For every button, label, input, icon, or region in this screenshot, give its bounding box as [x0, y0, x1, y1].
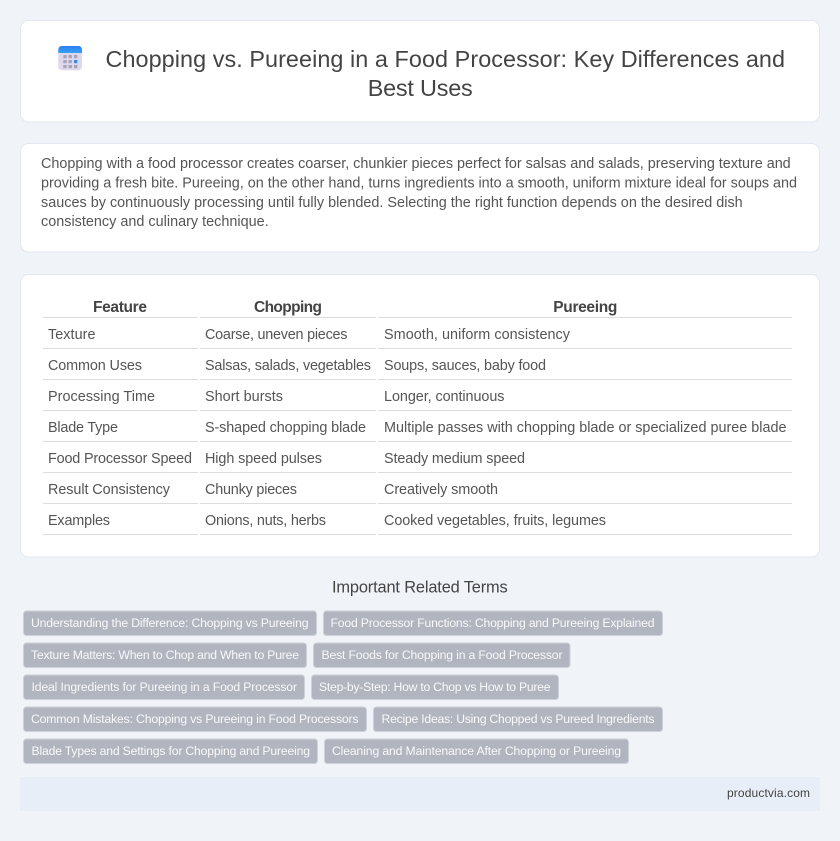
- tag: Ideal Ingredients for Pureeing in a Food Processor: [32, 680, 297, 694]
- panel: title header: [20, 20, 820, 122]
- tag: [324, 611, 662, 636]
- table row: Examples: Onions, nuts, herbs: [205, 513, 326, 529]
- table row: Texture: Texture: [48, 327, 96, 343]
- table row: Result Consistency: [43, 482, 792, 504]
- table row: Examples: Cooked vegetables, fruits, legumes: [384, 513, 606, 529]
- tag: Common Mistakes: Chopping vs Pureeing in Food Processors: [31, 712, 358, 726]
- table header row: Chopping: [254, 299, 322, 316]
- table row: Texture: [43, 327, 792, 349]
- tag: Food Processor Functions: Chopping and Pureeing Explained: [330, 616, 654, 630]
- table header row: [43, 299, 792, 318]
- footer bar: [20, 777, 820, 811]
- tag: Cleaning and Maintenance After Chopping or Pureeing: [332, 744, 621, 758]
- table row: Examples: Examples: [48, 513, 110, 529]
- tag: [24, 611, 316, 636]
- title: Best Uses: [368, 75, 473, 101]
- table row: Blade Type: S-shaped chopping blade: [205, 420, 366, 436]
- text block: intro: Chopping with a food processor creates coarser, chunkier pieces perfect for salsas and salads, preserving texture and: [41, 156, 791, 172]
- table row: Food Processor Speed: [43, 451, 792, 473]
- tag: Recipe Ideas: Using Chopped vs Pureed Ingredients: [382, 712, 654, 726]
- table row: Blade Type: Blade Type: [48, 420, 118, 436]
- table row: Blade Type: [43, 420, 792, 442]
- table row: Food Processor Speed: High speed pulses: [205, 451, 322, 467]
- table row: Common Uses: [43, 358, 792, 380]
- icon: calendar grid: [58, 46, 82, 70]
- text block: intro: [41, 156, 797, 230]
- tag: Understanding the Difference: Chopping vs Pureeing: [31, 616, 308, 630]
- table header row: Pureeing: [553, 299, 617, 316]
- table row: Food Processor Speed: Steady medium speed: [384, 451, 525, 467]
- tag: Best Foods for Chopping in a Food Processor: [322, 648, 562, 662]
- text block: intro: sauces by continuously processing until fully blended. Selecting the right function depends on the desired dish: [41, 195, 743, 211]
- tag: Step-by-Step: How to Chop vs How to Puree: [319, 680, 551, 694]
- footer source text: productvia.com: [727, 786, 810, 800]
- table row: Processing Time: Longer, continuous: [384, 389, 504, 405]
- panel: intro paragraph: [20, 144, 820, 252]
- tag: [312, 675, 558, 700]
- table row: Processing Time: Processing Time: [48, 389, 155, 405]
- table row: Texture: Coarse, uneven pieces: [205, 327, 348, 343]
- title: Chopping vs. Pureeing in a Food Processor: Key Differences and: [106, 46, 785, 72]
- table row: Result Consistency: Creatively smooth: [384, 482, 498, 498]
- table row: Texture: Smooth, uniform consistency: [384, 327, 571, 343]
- table row: Result Consistency: Result Consistency: [48, 482, 171, 498]
- tag: Blade Types and Settings for Chopping and Pureeing: [32, 744, 310, 758]
- tag: [374, 707, 662, 732]
- table row: Common Uses: Salsas, salads, vegetables: [205, 358, 371, 374]
- text block: intro: consistency and culinary technique.: [41, 214, 269, 230]
- tag: [24, 707, 366, 732]
- table row: Result Consistency: Chunky pieces: [205, 482, 297, 498]
- table header row: Feature: [93, 299, 147, 316]
- tag: Texture Matters: When to Chop and When to Puree: [31, 648, 299, 662]
- tag: [24, 643, 306, 668]
- table row: Processing Time: [43, 389, 792, 411]
- text block: intro: providing a fresh bite. Pureeing, on the other hand, turns ingredients into a smooth, uniform mixture ideal for soups and: [41, 175, 797, 191]
- tag: [24, 739, 318, 764]
- table row: Examples: [43, 513, 792, 535]
- table row: Processing Time: Short bursts: [205, 389, 283, 405]
- table row: Common Uses: Common Uses: [48, 358, 142, 374]
- tag: [24, 675, 304, 700]
- heading: Important Related Terms: Important Related Terms: [332, 579, 508, 597]
- tag: [314, 643, 570, 668]
- tag cloud: related terms: [24, 611, 662, 764]
- table row: Common Uses: Soups, sauces, baby food: [384, 358, 546, 374]
- panel: comparison table: [20, 274, 820, 557]
- title: [106, 46, 785, 101]
- table row: Food Processor Speed: Food Processor Speed: [48, 451, 192, 467]
- table row: Blade Type: Multiple passes with chopping blade or specialized puree blade: [384, 420, 786, 436]
- tag: [324, 739, 628, 764]
